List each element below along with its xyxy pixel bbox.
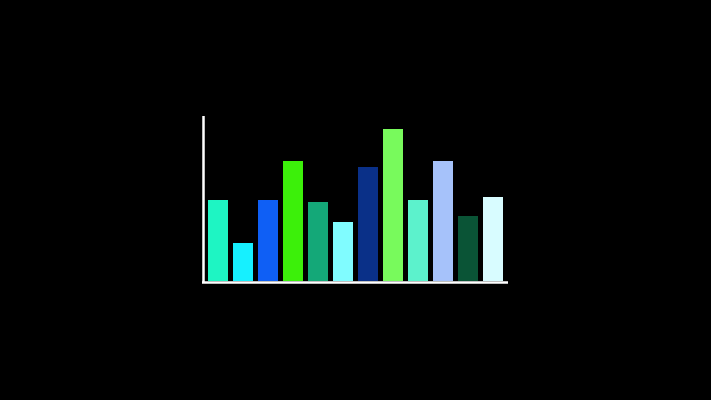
axes — [202, 116, 508, 283]
bars — [208, 129, 503, 281]
